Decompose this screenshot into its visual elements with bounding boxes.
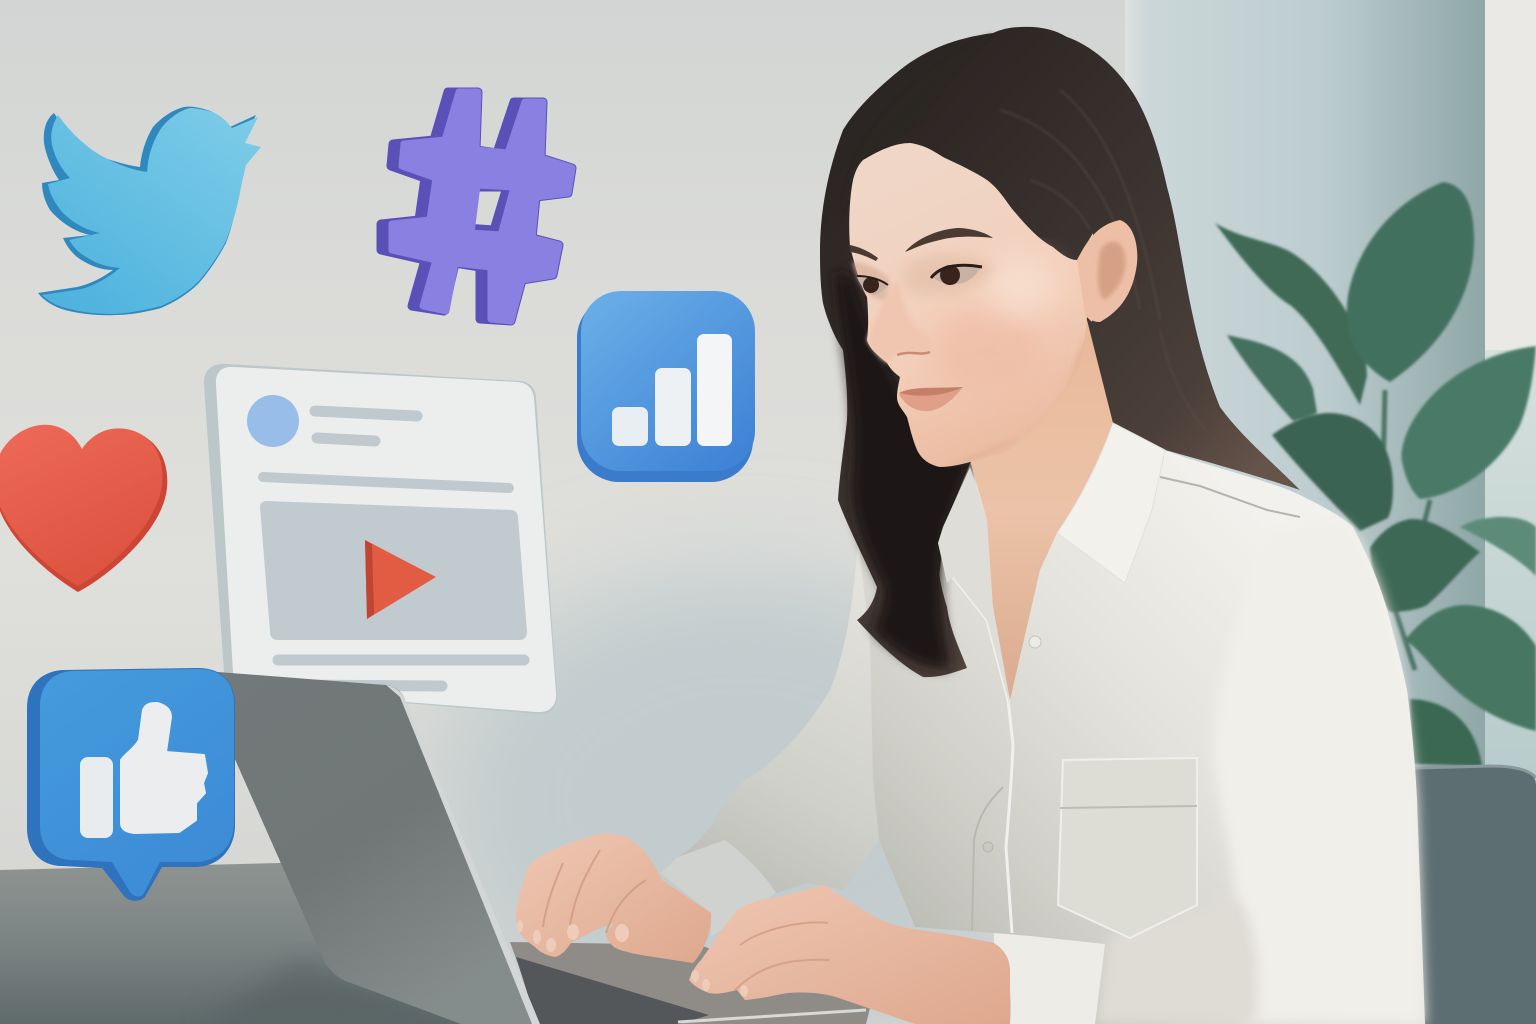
leaf 5 (1402, 346, 1536, 499)
eye socket shade (905, 254, 995, 295)
thumb (80, 703, 207, 838)
left sleeve (660, 540, 879, 937)
fingers (543, 850, 646, 933)
cuff: right sleeve (994, 933, 1105, 1024)
leaf 2 (1347, 182, 1474, 382)
keyboard (516, 957, 709, 1024)
shirt body (858, 448, 1425, 1024)
cheek blush (930, 308, 1040, 392)
placket (953, 577, 1013, 933)
hair strands (1000, 90, 1230, 455)
chair (1415, 766, 1536, 1024)
base (510, 942, 870, 1024)
play button (365, 540, 436, 619)
desk shadow (200, 960, 480, 1024)
icon: hashtag (381, 92, 572, 321)
leaf 3 (1227, 335, 1317, 421)
leaf 8 (1405, 605, 1536, 731)
ear (1077, 220, 1137, 322)
collar: left flap (938, 467, 1010, 707)
buttons (983, 636, 1041, 852)
dark left lock (835, 270, 975, 668)
pocket (1058, 758, 1197, 938)
chart bars (612, 334, 732, 446)
neck (970, 320, 1113, 700)
laptop (200, 672, 870, 1024)
hand: right (689, 885, 1010, 1024)
arm highlight (1213, 520, 1425, 1024)
leaf 9 (1410, 699, 1482, 766)
collar: right flap (1057, 423, 1165, 583)
plant (1215, 182, 1536, 766)
eye: far (857, 276, 888, 295)
nails (517, 920, 629, 952)
text lines (315, 411, 417, 441)
jaw shadow (945, 325, 1085, 466)
panel: social post card (204, 364, 557, 714)
icon: twitter bird (38, 107, 261, 315)
video frame (260, 501, 527, 640)
mouth (899, 387, 963, 411)
icon: heart (0, 425, 167, 592)
woman (660, 27, 1425, 1024)
hand: left (516, 834, 711, 963)
hair (820, 27, 1300, 677)
avatar (247, 395, 299, 447)
eyebrows (905, 228, 993, 252)
fingers (735, 922, 830, 990)
leaf 6 (1370, 519, 1480, 612)
hair part (843, 33, 993, 215)
shoulder seam (1160, 477, 1300, 517)
nails (691, 970, 748, 997)
lid (218, 672, 536, 1024)
desk (0, 862, 500, 1024)
leaf 4 (1272, 413, 1393, 531)
nose (867, 280, 932, 363)
face (849, 143, 1137, 467)
eye: near (931, 265, 982, 285)
leaf 1 (1215, 223, 1367, 405)
icon: bar chart badge (577, 291, 755, 482)
leaf 7 (1460, 517, 1536, 576)
icon: thumbs-up speech bubble (27, 668, 235, 901)
